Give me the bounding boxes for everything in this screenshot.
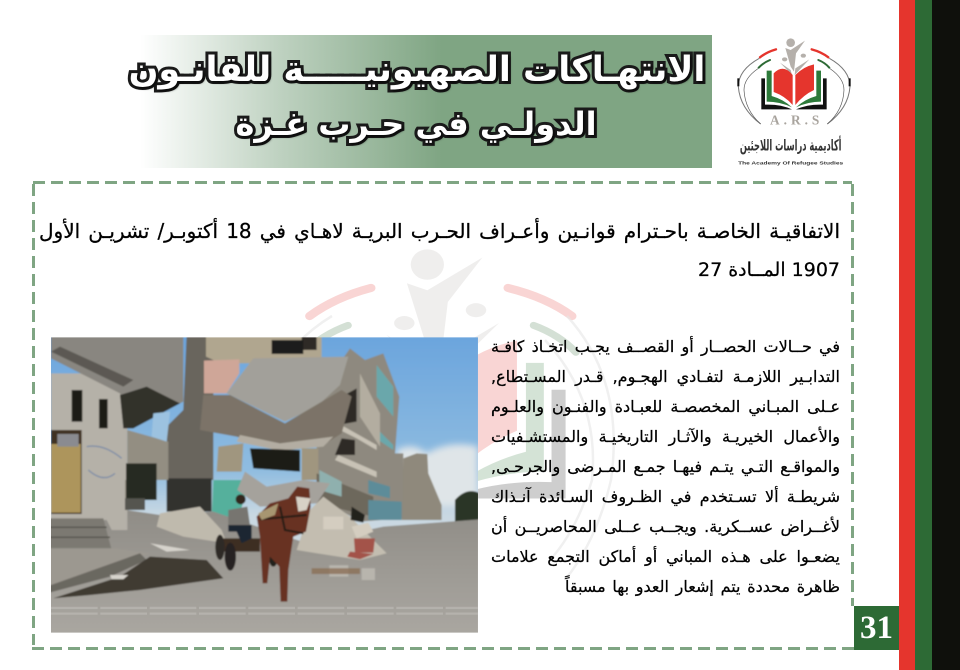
body text: يضعـوا على هـذه المباني أو أماكن التجمع علامات bbox=[491, 547, 840, 566]
logo: A.R.S bbox=[770, 113, 819, 128]
page number badge: 31 bbox=[860, 610, 893, 646]
main tower bbox=[167, 335, 213, 480]
heading line 2: 1907 المــادة 27 bbox=[698, 259, 840, 281]
left building bbox=[51, 373, 127, 530]
title line 2: الدولـي في حـرب غـزة bbox=[235, 105, 597, 143]
page number badge bbox=[854, 606, 899, 650]
body text bbox=[491, 336, 840, 596]
fallen slab bbox=[237, 472, 330, 507]
heading line 1: الاتفاقيـة الخاصـة باحـترام قوانـين وأعـراف الحـرب البريـة لاهـاي في 18 أكتوبـر/ تشريـن الأول bbox=[39, 219, 840, 243]
body text: والأعمال الخيريـة والآثـار التاريخيـة والمستشـفيات bbox=[491, 427, 840, 446]
collapsed slab bbox=[227, 357, 348, 422]
body text: عـلى المبـاني المخصصـة للعبـادة والفنـون والعلـوم bbox=[491, 397, 840, 416]
ground bbox=[47, 510, 480, 637]
body text: التدابـير اللازمـة لتفـادي الهجـوم, قـدر المسـتطاع, bbox=[491, 367, 840, 386]
logo: أكاديمية دراسات اللاجئين bbox=[740, 136, 841, 155]
body text: شريطـة ألا تسـتخدم في الظـروف السـائدة آنـذاك bbox=[491, 487, 840, 506]
horse bbox=[257, 487, 311, 602]
horse cart and driver bbox=[217, 538, 260, 552]
rubble heap bbox=[297, 497, 387, 560]
clouds bbox=[397, 444, 478, 507]
watermark strip bbox=[51, 608, 478, 614]
back upper building bbox=[203, 335, 322, 363]
side stripes bbox=[899, 0, 960, 670]
photo: destroyed building and horse cart bbox=[51, 337, 478, 633]
logo: The Academy Of Refugee Studies bbox=[738, 160, 844, 166]
right tower bbox=[317, 348, 403, 522]
steps and pavement bbox=[47, 518, 112, 550]
body text: لأغــراض عســكرية. ويجــب عــلى المحاصريــن أن bbox=[491, 517, 840, 536]
title band bbox=[110, 35, 712, 168]
body text: ظاهرة محددة يتم إشعار العدو بها مسبقاً bbox=[565, 577, 840, 596]
body text: والمواقـع التـي يتـم فيهـا جمـع المـرضى والجرحـى, bbox=[491, 457, 840, 476]
body text: في حــالات الحصــار أو القصــف يجـب اتخـاذ كافـة bbox=[491, 337, 840, 356]
rubble layer bbox=[200, 390, 352, 447]
title line 1: الانتهـاكات الصهيونيـــــة للقانـون bbox=[129, 50, 705, 90]
distant buildings bbox=[402, 453, 442, 520]
